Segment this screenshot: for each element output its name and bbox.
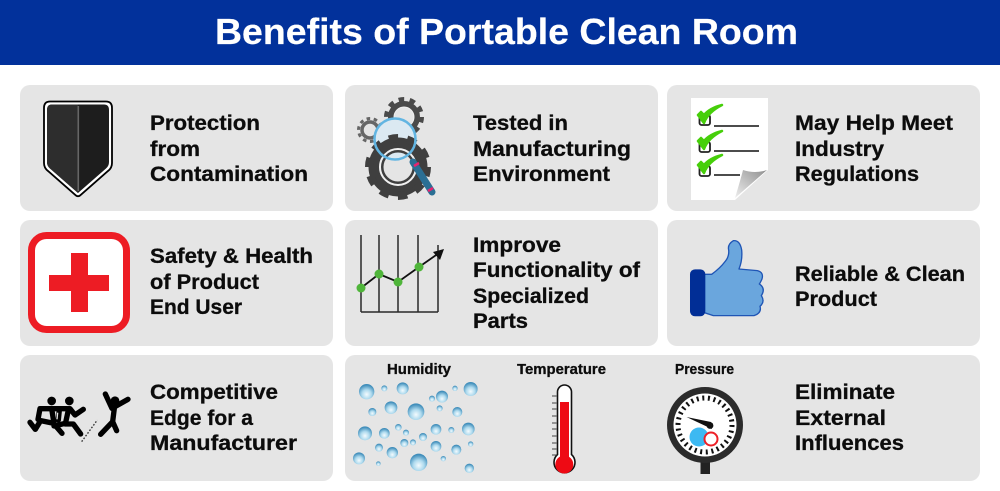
icon: pressure gauge	[667, 362, 743, 474]
icon: humidity droplets: Humidity	[387, 362, 451, 378]
icon: thermometer	[517, 362, 606, 474]
text: protection from contamination: from	[150, 137, 200, 161]
chart: rising line	[356, 235, 444, 312]
panel: may help meet industry regulations	[667, 85, 980, 211]
text: safety and health: End User	[150, 295, 243, 319]
panel: eliminate external influences	[345, 355, 980, 481]
text: reliable and clean product: Reliable & Clean	[795, 262, 965, 286]
text: eliminate external influences	[795, 380, 904, 455]
icon: humidity droplets	[353, 362, 478, 473]
icon: runners	[30, 394, 128, 442]
title banner: Benefits of Portable Clean Room	[215, 11, 798, 52]
text: reliable and clean product	[795, 262, 965, 311]
text: improve functionality	[473, 233, 641, 333]
panel: protection from contamination	[20, 85, 333, 211]
text: may help meet industry regulations	[795, 111, 953, 186]
panel: tested in manufacturing environment	[345, 85, 658, 211]
icon: red cross	[32, 236, 126, 330]
panel: improve functionality	[345, 220, 658, 346]
text: eliminate external influences: External	[795, 406, 886, 430]
text: improve functionality: Functionality of	[473, 258, 641, 282]
text: may help meet industry regulations: Regulations	[795, 162, 919, 186]
text: protection from contamination: Contamination	[150, 162, 308, 186]
icon: gears and magnifier	[358, 100, 433, 196]
text: eliminate external influences: Influences	[795, 431, 904, 455]
text: tested in manufacturing environment: Environment	[473, 162, 610, 186]
text: improve functionality: Parts	[473, 309, 528, 333]
text: tested in manufacturing environment: Tested in	[473, 111, 568, 135]
text: competitive edge: Competitive	[150, 380, 278, 404]
text: competitive edge: Edge for a	[150, 406, 254, 430]
text: safety and health	[150, 244, 313, 319]
text: safety and health: of Product	[150, 270, 259, 294]
panel: competitive edge	[20, 355, 333, 481]
text: tested in manufacturing environment	[473, 111, 631, 186]
panel: safety and health	[20, 220, 333, 346]
text: tested in manufacturing environment: Manufacturing	[473, 137, 631, 161]
icon: shield	[44, 102, 112, 196]
icon: thumbs up	[690, 241, 763, 316]
icon: checklist	[691, 98, 768, 200]
text: reliable and clean product: Product	[795, 287, 877, 311]
text: improve functionality: Improve	[473, 233, 561, 257]
panel: reliable and clean product	[667, 220, 980, 346]
text: improve functionality: Specialized	[473, 284, 589, 308]
text: eliminate external influences: Eliminate	[795, 380, 895, 404]
icon: thermometer: Temperature	[517, 362, 606, 378]
text: safety and health: Safety & Health	[150, 244, 313, 268]
title banner	[0, 0, 1000, 65]
text: may help meet industry regulations: Industry	[795, 137, 884, 161]
text: competitive edge	[150, 380, 298, 455]
text: protection from contamination	[150, 111, 308, 186]
text: may help meet industry regulations: May Help Meet	[795, 111, 953, 135]
icon: pressure gauge: Pressure	[675, 362, 734, 378]
text: protection from contamination: Protection	[150, 111, 260, 135]
text: competitive edge: Manufacturer	[150, 431, 298, 455]
